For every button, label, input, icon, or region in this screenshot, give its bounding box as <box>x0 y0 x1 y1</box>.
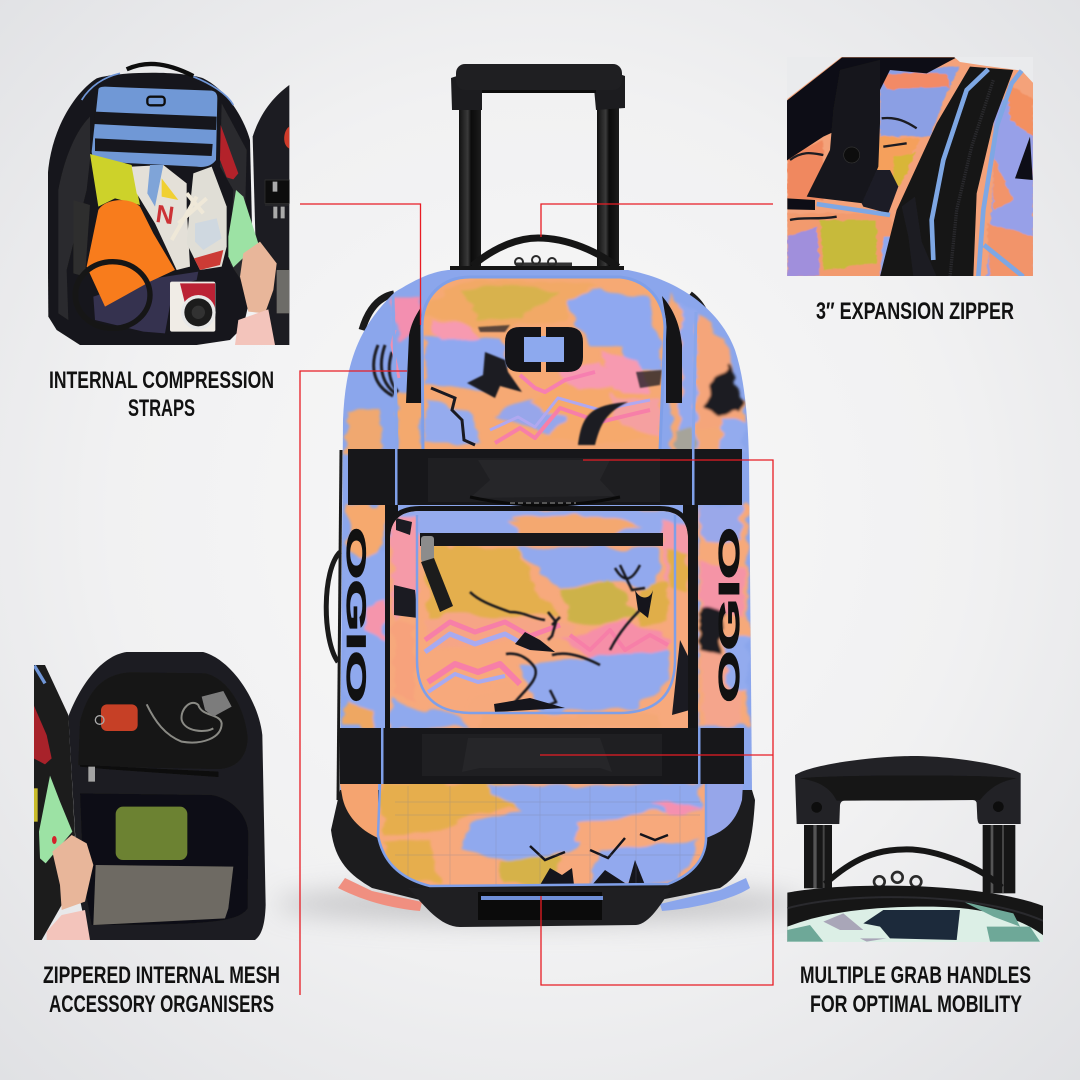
pouch logo <box>147 97 165 105</box>
orange beanie <box>87 200 175 307</box>
seam piping <box>787 897 1045 922</box>
right sneaker <box>187 167 227 270</box>
organiser pouch <box>92 87 217 167</box>
leader: internal compression straps top <box>300 204 420 325</box>
wave lines <box>425 622 668 692</box>
pouch straps <box>94 112 217 156</box>
upper body piping <box>393 296 696 450</box>
front pocket zipper <box>420 533 663 546</box>
left lid <box>34 665 75 940</box>
blue trim <box>34 666 45 683</box>
sneaker inner <box>195 218 222 250</box>
caption: expansion zipper: 3″ EXPANSION ZIPPER <box>816 298 1014 325</box>
panel: mesh organisers photo <box>34 651 266 940</box>
red earbud case <box>95 704 138 731</box>
caption: mesh organisers: ACCESSORY ORGANISERS <box>49 991 274 1018</box>
case top black <box>787 886 1045 943</box>
lid zip pulls <box>273 182 285 218</box>
yellow shirt <box>90 154 140 207</box>
print strokes <box>790 118 917 220</box>
green notebook <box>228 190 258 267</box>
hand <box>240 242 277 313</box>
caption: internal compression straps: STRAPS <box>128 395 195 422</box>
back shell <box>68 651 266 940</box>
zip pulls <box>88 767 102 810</box>
blue trim <box>82 73 233 105</box>
body side vertical logo right: OGIO <box>714 527 746 703</box>
red bottle <box>220 125 238 179</box>
shoulder pink line <box>392 330 399 378</box>
left black frame edge <box>338 450 341 800</box>
red nail <box>52 836 57 844</box>
front pocket <box>385 506 692 728</box>
cable and charger <box>147 691 232 743</box>
lid mesh pocket <box>277 270 289 313</box>
green notebook <box>39 776 72 863</box>
telescopic handle <box>451 64 625 275</box>
marble black blots <box>494 590 653 712</box>
callout leader lines <box>300 204 773 995</box>
dark marble patch <box>862 170 898 213</box>
right shoulder rim <box>690 294 706 314</box>
base marble edge right <box>660 878 750 911</box>
red bottle <box>34 705 52 764</box>
grey backdrop corners <box>785 55 1037 101</box>
top pocket <box>422 277 665 450</box>
front logo mark <box>505 327 583 372</box>
lower strap with grab handle <box>340 728 744 784</box>
handle screws <box>811 802 822 813</box>
caption: grab handles <box>800 962 1031 1018</box>
belt <box>75 262 150 328</box>
zip pull <box>421 536 453 612</box>
shoulder rim details <box>362 294 394 330</box>
lid red accessory <box>284 127 289 149</box>
lower right side marble <box>706 784 743 838</box>
shoulder print strokes <box>374 345 398 396</box>
blue piping strips <box>817 69 1023 277</box>
right lid <box>253 85 289 345</box>
caption: internal compression straps <box>49 367 274 422</box>
leader: expansion zipper <box>541 204 773 237</box>
mid section side panels and black inner columns <box>385 505 398 730</box>
camo grey <box>823 913 887 942</box>
leader: grab handles <box>541 460 773 985</box>
upper strap with grab handle <box>348 449 742 505</box>
grey mesh item <box>93 865 233 925</box>
lower black base <box>331 790 755 900</box>
camo green <box>787 902 1040 942</box>
base marble edge <box>338 878 422 911</box>
wheel bumper <box>408 888 672 927</box>
hand <box>52 835 93 910</box>
caption: mesh organisers <box>43 962 280 1018</box>
panel: internal compression straps photo <box>47 64 289 345</box>
inner wall <box>58 103 247 320</box>
dark tube <box>73 200 90 277</box>
black handle wedge <box>785 57 957 162</box>
floor shadow <box>275 884 805 924</box>
yellow tag <box>34 788 38 822</box>
lower side marble <box>340 784 378 838</box>
bag body base <box>340 270 752 895</box>
right screw <box>993 801 1004 812</box>
side zippers <box>406 296 682 403</box>
zipper close-up marble base <box>787 57 1034 277</box>
zip bands <box>80 765 218 777</box>
open case shell <box>47 73 253 345</box>
handle shadow band <box>800 775 1017 801</box>
panel: expansion zipper photo <box>785 55 1037 277</box>
top carry handle and zip pulls <box>450 238 624 272</box>
zip pulls <box>874 872 921 887</box>
handle poles <box>804 825 1015 893</box>
camera <box>170 282 216 332</box>
upper mesh pocket <box>78 672 248 769</box>
zip band <box>880 67 1013 277</box>
sleeve <box>47 910 90 940</box>
pocket black print <box>467 325 662 445</box>
caption: mesh organisers: ZIPPERED INTERNAL MESH <box>43 962 280 989</box>
left sneaker <box>132 165 190 270</box>
camo patches <box>863 910 960 940</box>
main product: rolling bag <box>326 64 755 927</box>
zip pull <box>902 197 937 277</box>
camo fabric <box>787 907 1045 943</box>
pocket wave lines <box>490 372 650 443</box>
print patches <box>787 67 1033 277</box>
black vertical strap <box>807 60 880 203</box>
case top handle <box>127 64 193 76</box>
leader: lower grab handle <box>540 754 773 756</box>
navy clothes <box>93 272 198 333</box>
sneaker yellow patch <box>162 178 178 200</box>
side handle <box>326 552 340 662</box>
leader: zippered organisers <box>300 371 407 995</box>
green mesh item <box>116 807 187 860</box>
front bottom flap <box>378 784 706 886</box>
sneaker stripe <box>147 165 163 207</box>
handle grip <box>795 756 1021 824</box>
black edge tip <box>787 137 1033 210</box>
caption: internal compression straps: INTERNAL COMPRESSION <box>49 367 274 394</box>
snap button <box>844 147 860 163</box>
lower mesh pocket <box>80 793 248 925</box>
panel: grab handles photo <box>787 756 1045 943</box>
lid zip details <box>265 180 289 205</box>
sneaker laces <box>172 193 207 240</box>
black marble cracks <box>470 565 645 708</box>
sneaker letter: N <box>154 200 176 230</box>
sneaker colour bands <box>194 250 223 270</box>
body marble print <box>345 295 748 726</box>
zipper teeth <box>950 80 993 277</box>
sleeve <box>235 309 275 345</box>
body side vertical logo left: OGIO <box>341 527 371 703</box>
carry handle <box>825 849 1002 887</box>
panel black print at edges <box>394 518 690 715</box>
